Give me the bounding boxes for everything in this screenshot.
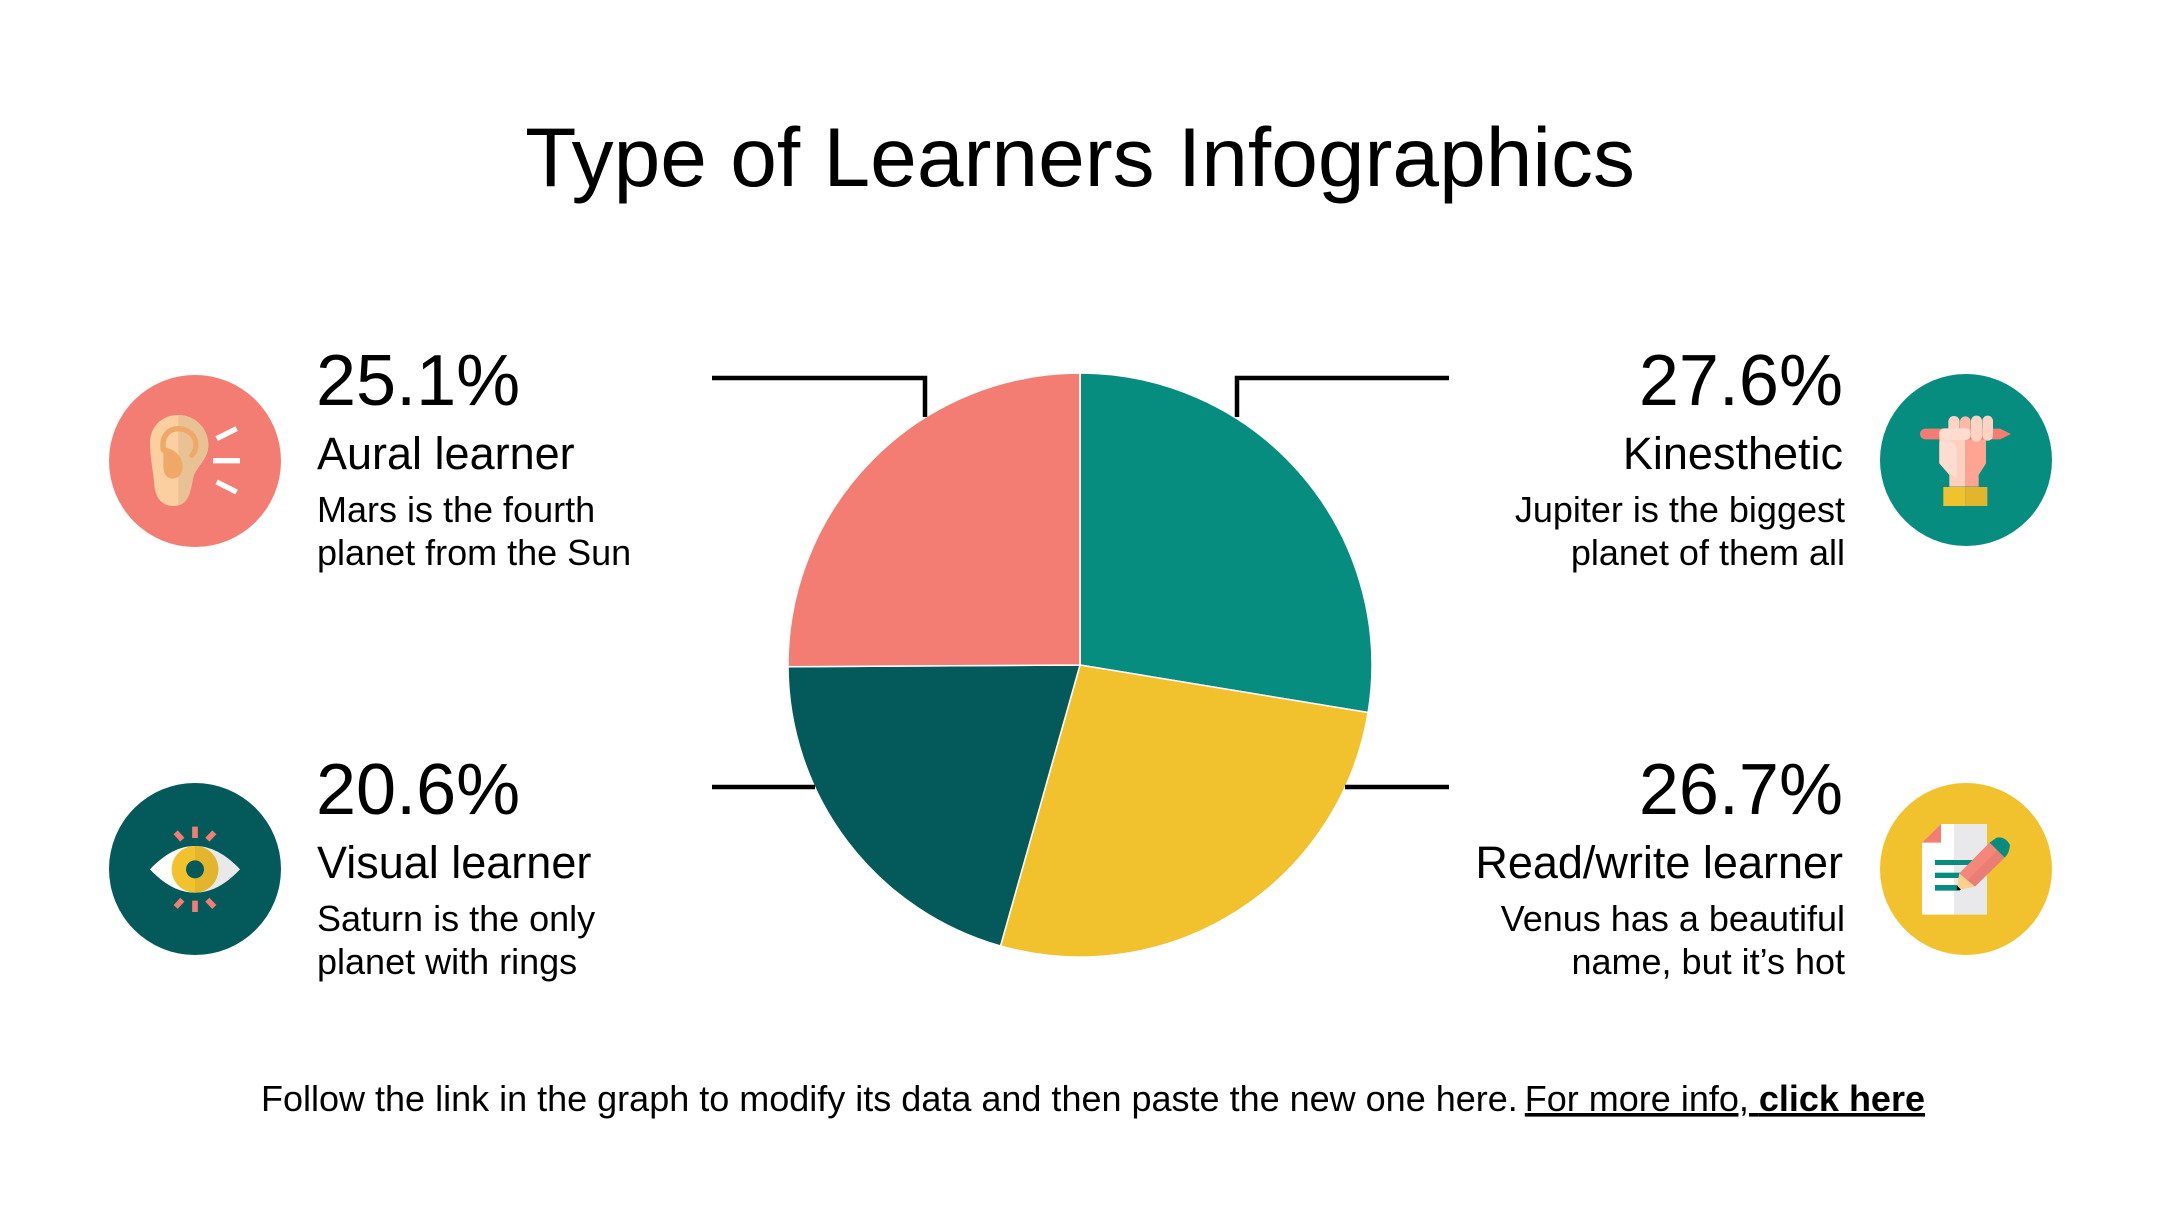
text block: Kinesthetic: Jupiter is the biggest — [1515, 489, 1845, 530]
icon: ear — [109, 375, 281, 547]
pie slice: Aural learner 25.1% — [788, 373, 1080, 667]
text block: Visual learner: Visual learner — [317, 837, 591, 888]
text block: Visual learner: planet with rings — [317, 941, 577, 982]
connector: Kinesthetic — [1237, 378, 1449, 417]
icon: hand holding pencil — [1880, 374, 2052, 546]
pie slice: Kinesthetic 27.6% — [1080, 373, 1372, 712]
text block: Kinesthetic — [1515, 341, 1845, 573]
title: Type of Learners Infographics — [525, 110, 1635, 204]
text block: Read/write learner — [1475, 750, 1845, 982]
text block: Read/write learner: Read/write learner — [1475, 837, 1843, 888]
pie chart — [788, 373, 1372, 957]
text block: Aural learner — [316, 341, 631, 573]
text block: Aural learner: 25.1% — [316, 341, 520, 421]
text block: Kinesthetic: 27.6% — [1639, 341, 1843, 421]
text block: Read/write learner: 26.7% — [1639, 750, 1843, 830]
footer note: Follow the link in the graph to modify its data and then paste the new one here. For more info, click here — [261, 1078, 1925, 1119]
text block: Read/write learner: Venus has a beautiful — [1501, 898, 1845, 939]
text block: Kinesthetic: planet of them all — [1571, 532, 1845, 573]
text block: Aural learner: Mars is the fourth — [317, 489, 595, 530]
text block: Kinesthetic: Kinesthetic — [1623, 428, 1843, 479]
text block: Aural learner: planet from the Sun — [317, 532, 631, 573]
icon: document and pencil — [1880, 783, 2052, 955]
text block: Visual learner: Saturn is the only — [317, 898, 595, 939]
pie slice: Read/write learner 26.7% — [1000, 665, 1368, 957]
connector: Read/write learner — [1345, 785, 1449, 789]
text block: Aural learner: Aural learner — [317, 428, 575, 479]
pie slice: Visual learner 20.6% — [788, 665, 1080, 946]
text block: Visual learner: 20.6% — [316, 750, 520, 830]
text block: Visual learner — [316, 750, 595, 982]
text block: Read/write learner: name, but it’s hot — [1572, 941, 1845, 982]
connector: Visual learner — [712, 785, 815, 789]
connector: Aural learner — [712, 378, 925, 417]
icon: eye — [109, 783, 281, 955]
